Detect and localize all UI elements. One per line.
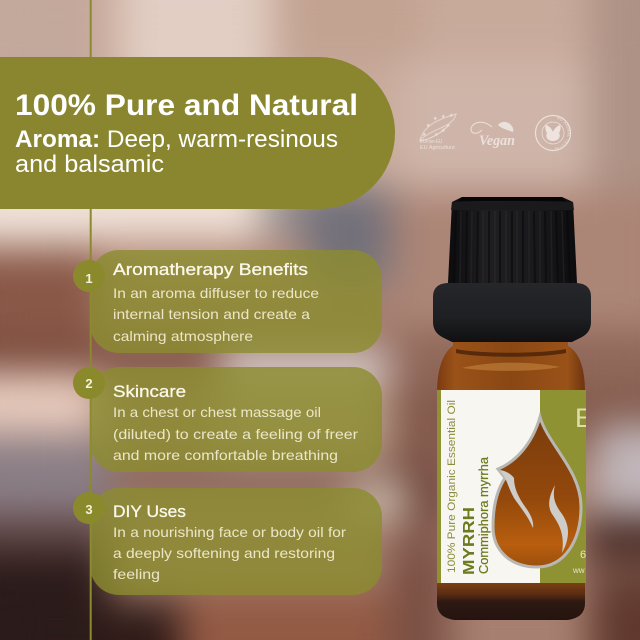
card 3 body: a deeply softening and restoring — [113, 545, 335, 561]
certification icons — [419, 113, 571, 152]
icon: EU organic leaf: EU/non-EU — [420, 139, 442, 145]
icon: EU organic leaf: ★ — [446, 123, 451, 129]
icon: EU organic leaf: ★ — [433, 116, 438, 122]
product bottle — [433, 197, 593, 620]
icon: EU organic leaf: ★ — [441, 128, 446, 134]
card 2 body: and more comfortable breathing — [113, 447, 338, 463]
card 2 body: (diluted) to create a feeling of freer — [113, 426, 358, 442]
clipped brand text on label: E — [575, 403, 593, 433]
card 3 body: In a nourishing face or body oil for — [113, 524, 346, 540]
latin name: Commiphora myrrha — [476, 456, 491, 574]
header panel — [0, 57, 395, 209]
card 1 title: Aromatherapy Benefits — [113, 260, 308, 279]
icon: EU organic leaf — [420, 113, 456, 151]
icon: vegan mark: Vegan — [479, 133, 515, 149]
card 3 body: feeling — [113, 566, 160, 582]
icon: no animal testing: NO ANIMAL TESTING — [555, 116, 570, 150]
icon: EU organic leaf: ★ — [434, 132, 439, 138]
clipped brand text on label: 6 — [580, 549, 586, 561]
clipped brand text on label — [573, 408, 586, 573]
card 1 body: In an aroma diffuser to reduce — [113, 285, 319, 301]
clipped brand text on label: ww — [572, 566, 585, 575]
icon: EU organic leaf: EU Agriculture — [420, 145, 455, 151]
icon: EU organic leaf: ★ — [449, 113, 454, 119]
card 3 title: DIY Uses — [113, 502, 186, 521]
card 2 body — [113, 404, 358, 463]
dropper collar — [433, 283, 591, 342]
card 1 body: internal tension and create a — [113, 306, 310, 322]
aroma description: and balsamic — [15, 151, 164, 178]
badge 3: 3 — [85, 502, 93, 517]
glass base — [437, 583, 585, 620]
badge 1: 1 — [85, 271, 93, 286]
badge 3 — [73, 492, 105, 524]
card 1 body — [113, 285, 319, 344]
aroma description: Aroma: Deep, warm-resinous — [15, 126, 338, 153]
card 2 body: In a chest or chest massage oil — [113, 404, 321, 420]
amber glass body — [437, 338, 585, 620]
ribbed cap — [448, 197, 577, 283]
product name: MYRRH: MYRRH — [461, 507, 478, 575]
card 1: Aromatherapy Benefits — [73, 250, 382, 353]
badge 2: 2 — [85, 376, 93, 391]
card 2: Skincare — [73, 367, 382, 472]
icon: no animal testing — [534, 114, 571, 152]
icon: EU organic leaf: ★ — [426, 123, 431, 129]
card 3 body — [113, 524, 346, 582]
icon: EU organic leaf: ★ — [422, 132, 427, 138]
drop emblem — [493, 417, 581, 567]
badge 2 — [73, 367, 105, 399]
heading: 100% Pure and Natural: 100% Pure and Natural — [15, 89, 358, 122]
icon: vegan mark — [471, 122, 515, 149]
badge 1 — [73, 260, 105, 292]
icon: EU organic leaf: ★ — [441, 114, 446, 120]
card 3: DIY Uses — [73, 488, 382, 595]
label — [437, 390, 593, 583]
vertical timeline line — [90, 0, 92, 640]
card 1 body: calming atmosphere — [113, 328, 253, 344]
card 2 title: Skincare — [113, 382, 186, 401]
rotated label text: 100% Pure Organic Essential Oil — [446, 400, 458, 573]
aroma description — [15, 126, 338, 178]
